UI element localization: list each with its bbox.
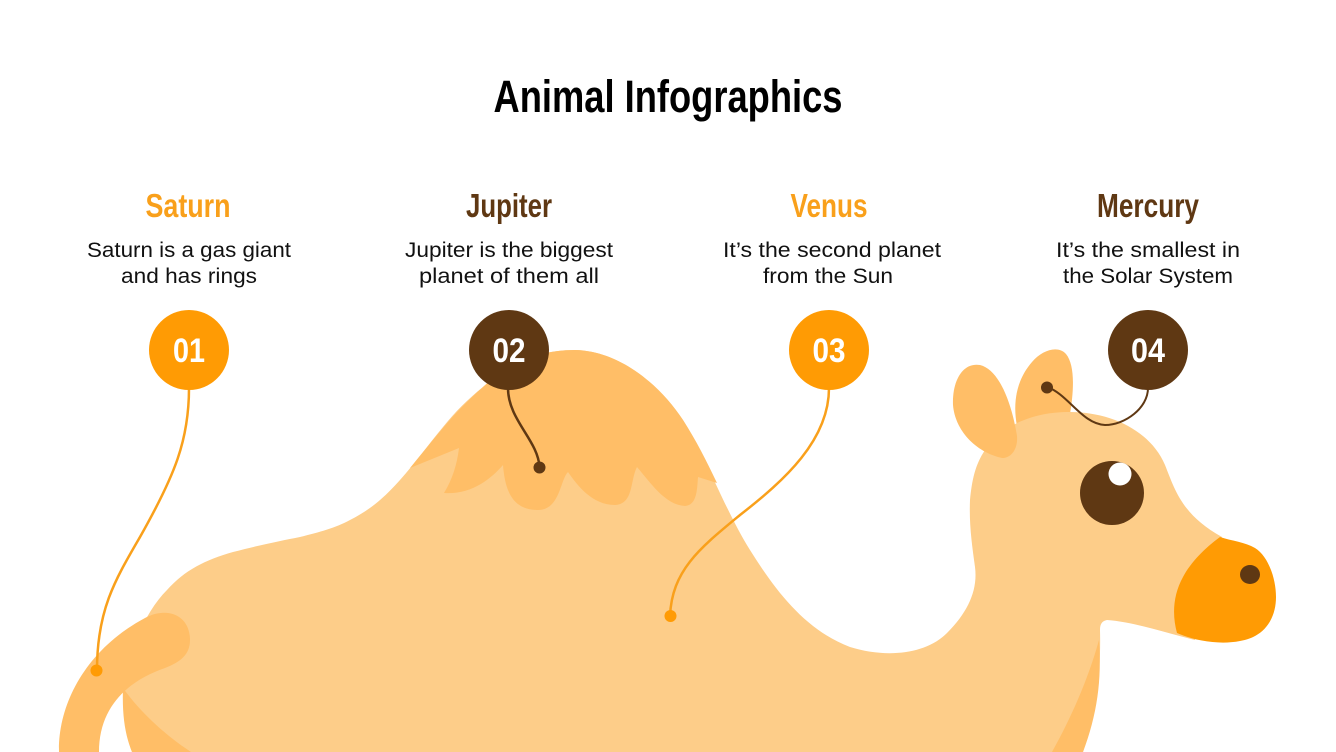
description: Saturn is a gas giant: [87, 239, 291, 262]
description: It’s the smallest in: [1056, 239, 1240, 262]
item 03: Venus: [664, 187, 941, 622]
item 01: Saturn: [87, 187, 291, 676]
connector: [670, 388, 829, 616]
rump shading: [123, 688, 191, 752]
item 01: Saturn: and has rings: [121, 265, 257, 288]
heading: Venus: [790, 187, 868, 224]
heading: Mercury: [1097, 187, 1200, 224]
icon: back ear: [1015, 349, 1073, 426]
icon: front ear: [953, 365, 1017, 458]
number badge: [149, 310, 229, 390]
description: It’s the second planet: [723, 239, 941, 262]
item 04: Mercury: 04: [1131, 332, 1165, 370]
item 03: Venus: from the Sun: [763, 265, 893, 288]
item 04: Mercury: the Solar System: [1063, 265, 1233, 288]
item 04: Mercury: [1041, 187, 1240, 425]
heading: Saturn: [146, 187, 230, 224]
tail: [59, 613, 190, 752]
connector: [508, 388, 540, 467]
icon: muzzle: [1174, 537, 1276, 643]
title: Animal Infographics: [494, 71, 842, 122]
icon: eye: [1080, 461, 1144, 525]
hump shading: [410, 350, 717, 510]
item 02: Jupiter: 02: [492, 332, 526, 370]
description: Jupiter is the biggest: [405, 239, 613, 262]
connector: [97, 388, 189, 670]
number badge: [789, 310, 869, 390]
number badge: [1108, 310, 1188, 390]
icon: nostril: [1240, 565, 1260, 584]
camel illustration: [59, 349, 1276, 752]
camel body: [124, 350, 1222, 752]
item 01: Saturn: 01: [173, 332, 205, 370]
marker dot: [534, 462, 546, 474]
number badge: [469, 310, 549, 390]
marker dot: [90, 664, 102, 676]
heading: Jupiter: [466, 187, 552, 224]
item 03: Venus: 03: [812, 332, 846, 370]
item 02: Jupiter: planet of them all: [419, 265, 599, 288]
item 02: Jupiter: [405, 187, 613, 474]
front leg shading: [1052, 640, 1100, 752]
marker dot: [664, 610, 676, 622]
marker dot: [1041, 382, 1053, 394]
connector: [1047, 387, 1148, 425]
